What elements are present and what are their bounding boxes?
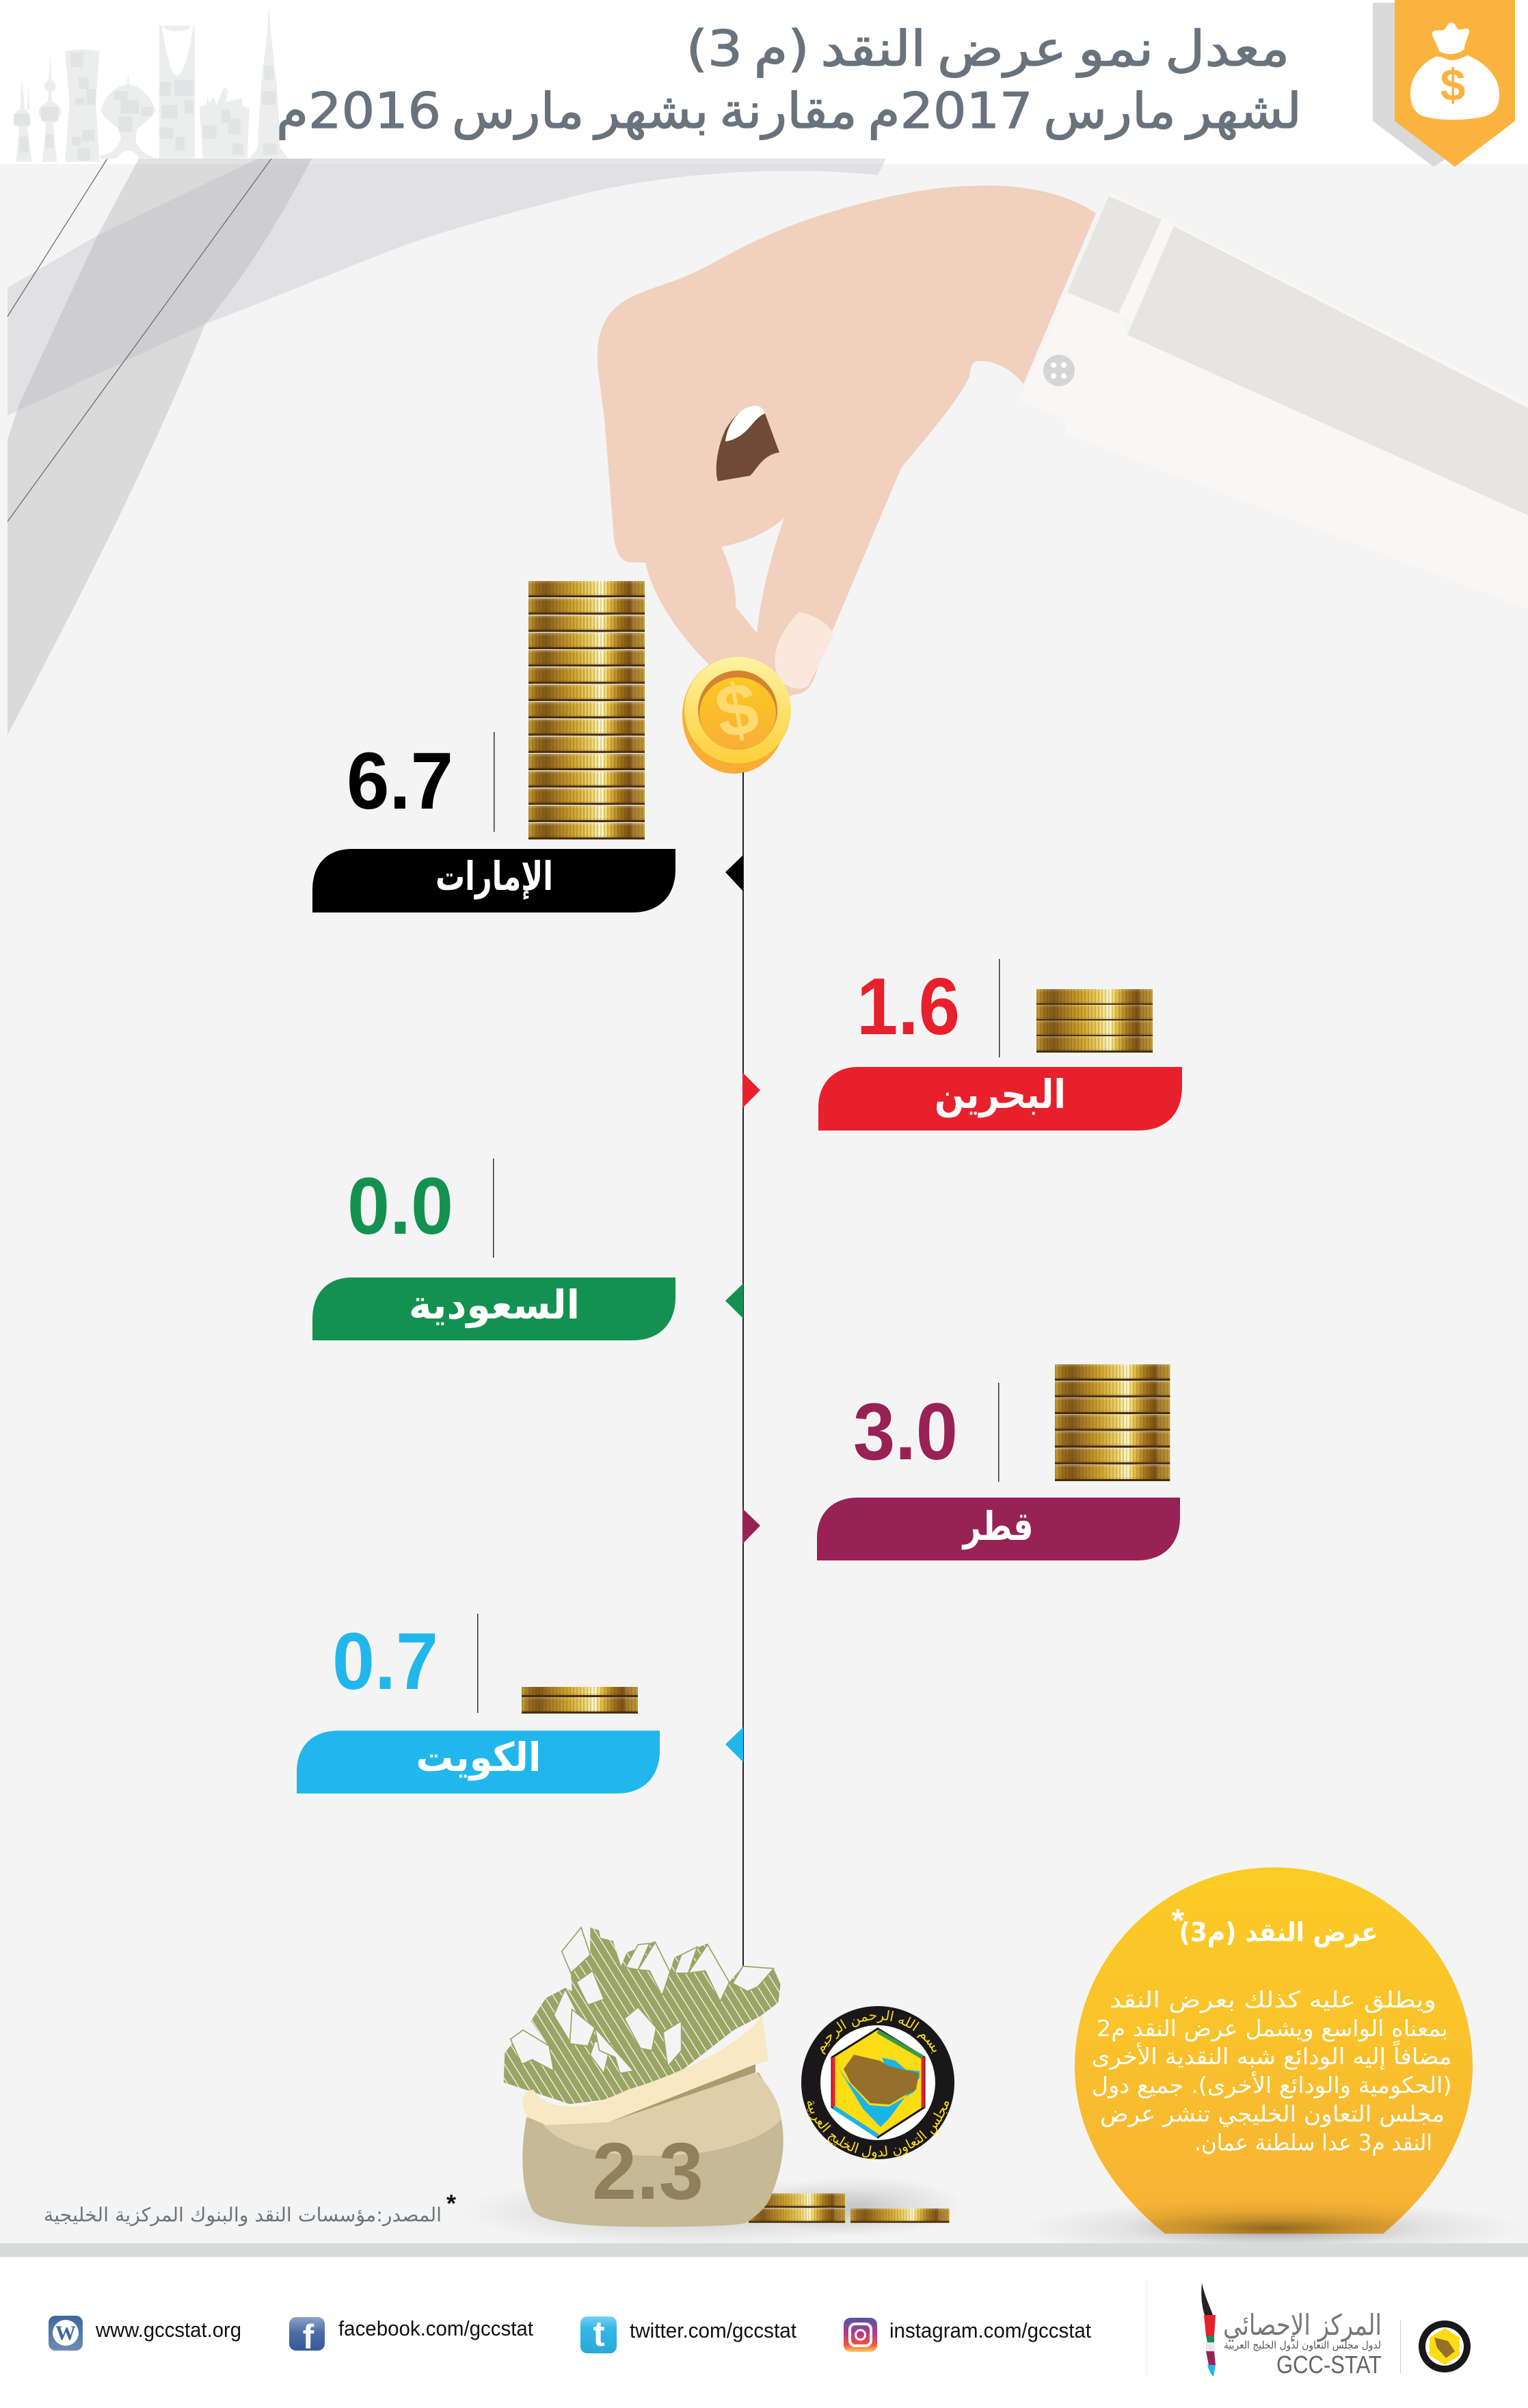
header band	[0, 0, 1528, 164]
value: 0.0	[347, 1161, 453, 1252]
source note	[44, 2189, 456, 2226]
callout body: (الحكومية والودائع الأخرى). جميع دول	[1091, 2071, 1452, 2098]
icon: wordpress	[49, 2316, 83, 2351]
marker	[742, 1072, 760, 1108]
title: لشهر مارس 2017م مقارنة بشهر مارس 2016م	[276, 82, 1302, 140]
value on sack: 2.3	[592, 2126, 703, 2217]
callout body	[1091, 1986, 1452, 2156]
icon: facebook	[289, 2317, 325, 2356]
logo: GCC emblem	[801, 2006, 954, 2160]
footer: twitter link	[580, 2314, 796, 2354]
title: معدل نمو عرض النقد (م 3)	[686, 20, 1289, 78]
footer: GCC-STAT logo: المركز الإحصائي	[1223, 2308, 1382, 2342]
coin stack	[1036, 989, 1153, 1053]
sack body	[522, 2072, 783, 2227]
value: 6.7	[347, 736, 453, 826]
coin stack	[522, 1681, 638, 1714]
icon: gold dollar coin: $	[710, 666, 764, 754]
icon: facebook: f	[303, 2318, 314, 2356]
callout: M3 definition	[1021, 1867, 1527, 2257]
panel: Qatar	[742, 1364, 1180, 1560]
coin stack	[528, 581, 645, 839]
marker	[725, 1727, 743, 1762]
small coins	[749, 2193, 949, 2223]
icon: gold dollar coin	[682, 657, 791, 774]
footer: facebook link: facebook.com/gccstat	[338, 2316, 533, 2340]
panel: Bahrain	[742, 959, 1182, 1131]
label pill: البحرين	[935, 1071, 1066, 1118]
label pill: الكويت	[416, 1734, 541, 1781]
timeline axis	[742, 772, 744, 1966]
title	[276, 20, 1302, 140]
icon: twitter	[580, 2314, 617, 2354]
label pill: الإمارات	[435, 853, 553, 900]
coin stack	[1055, 1364, 1170, 1481]
badge: money bag icon: $	[1440, 59, 1465, 110]
decorative swooshes top left	[8, 159, 886, 735]
value: 0.7	[332, 1616, 438, 1707]
label pill	[817, 1498, 1180, 1560]
value: 1.6	[857, 962, 960, 1052]
callout body: ويطلق عليه كذلك بعرض النقد	[1110, 1986, 1436, 2014]
illustration: hand	[598, 185, 1096, 711]
footer: website link: www.gccstat.org	[95, 2318, 241, 2342]
icon: wordpress: W	[55, 2322, 76, 2344]
footer: instagram link	[844, 2318, 1091, 2352]
callout body: النقد م3 عدا سلطنة عمان.	[1194, 2129, 1432, 2156]
banknotes	[504, 1927, 781, 2104]
badge: money bag icon	[1373, 0, 1515, 167]
asterisk: *	[1172, 1903, 1185, 1939]
skyline illustration	[14, 6, 289, 162]
callout body: مضافاً إليه الودائع شبه النقدية الأخرى	[1091, 2040, 1452, 2070]
panel: Kuwait	[297, 1614, 743, 1794]
label pill: السعودية	[409, 1282, 580, 1329]
callout body: بمعناه الواسع ويشمل عرض النقد م2	[1097, 2015, 1448, 2042]
icon: cuff button	[1043, 355, 1075, 386]
footer: instagram link: instagram.com/gccstat	[889, 2318, 1091, 2342]
emblem inscription: بسم الله الرحمن الرحيم	[820, 2010, 937, 2055]
label pill	[312, 1277, 675, 1340]
marker	[725, 855, 743, 891]
source note: المصدر:مؤسسات النقد والبنوك المركزية الخليجية	[44, 2204, 442, 2226]
label pill	[312, 849, 675, 912]
panel: UAE	[312, 581, 743, 912]
callout body: مجلس التعاون الخليجي تنشر عرض	[1100, 2100, 1445, 2128]
marker	[742, 1509, 760, 1544]
illustration: money bag with value	[458, 1927, 964, 2247]
ribbon	[1201, 2283, 1216, 2377]
footer: twitter link: twitter.com/gccstat	[630, 2318, 796, 2342]
marker	[725, 1284, 743, 1318]
label pill	[818, 1067, 1182, 1131]
footer: GCC-STAT logo: GCC-STAT	[1276, 2351, 1382, 2379]
source note: *	[446, 2189, 456, 2217]
footer: GCC-STAT logo: لدول مجلس التعاون لدول الخليج العربية	[1224, 2339, 1381, 2351]
label pill: قطر	[961, 1503, 1034, 1550]
panel: Saudi Arabia	[312, 1159, 743, 1340]
footer: GCC-STAT logo	[1147, 2280, 1471, 2379]
icon: twitter: t	[593, 2314, 605, 2354]
value: 3.0	[853, 1387, 958, 1477]
illustration: sleeve and cuff	[1019, 191, 1528, 609]
emblem inscription	[807, 2010, 949, 2160]
label pill	[297, 1731, 660, 1794]
footer: website link	[49, 2316, 241, 2351]
callout heading: عرض النقد (م3)	[1179, 1917, 1378, 1948]
small emblem	[1419, 2321, 1471, 2372]
icon: instagram	[844, 2318, 877, 2352]
emblem inscription: مجلس التعاون لدول الخليج العربية	[807, 2101, 949, 2160]
footer: facebook link	[289, 2316, 533, 2356]
footer band	[0, 2243, 1528, 2408]
sack rim	[523, 2014, 768, 2125]
